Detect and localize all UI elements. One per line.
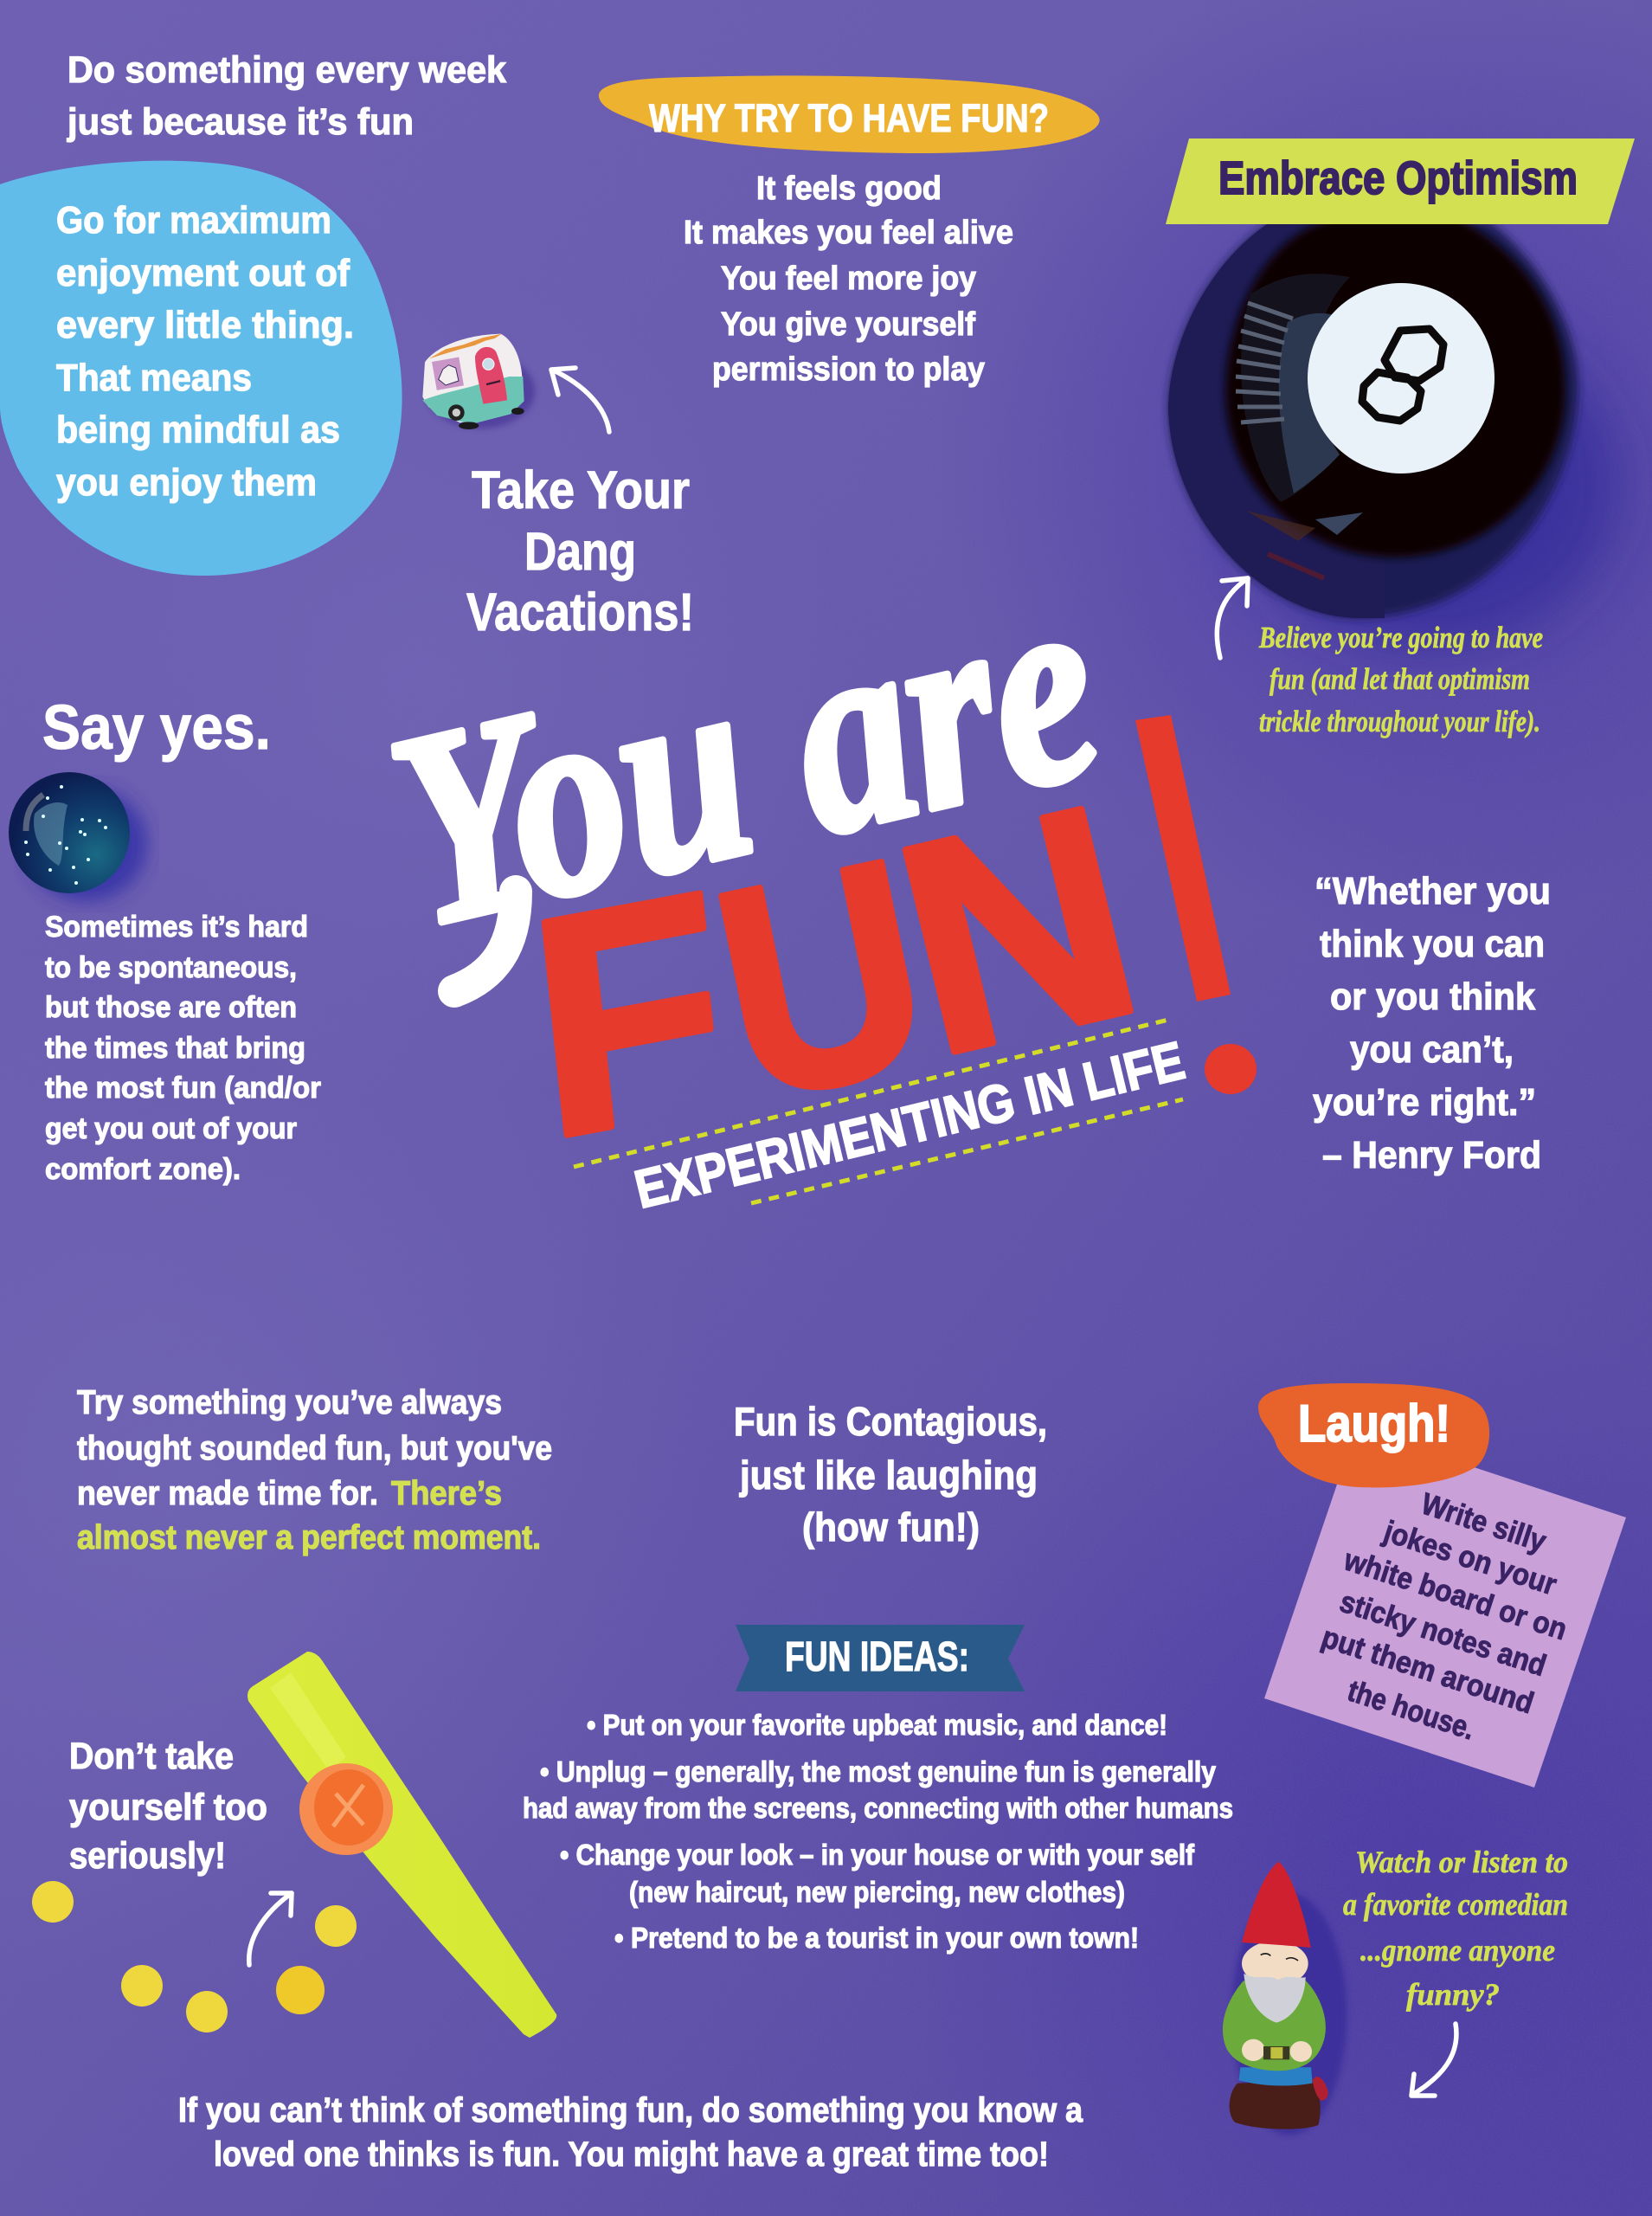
text: try something you've always thought sounded fun [77, 1384, 552, 1556]
text: don't take yourself too seriously: Don’t take [69, 1736, 234, 1777]
arrow: to eight ball [1217, 578, 1248, 658]
panel: blue blob with maximum enjoyment text: enjoyment out of [56, 252, 350, 294]
list: reasons to have fun: You give yourself [721, 306, 975, 343]
list: fun ideas [523, 1709, 1233, 1954]
list: fun ideas: had away from the screens, connecting with other humans [523, 1792, 1233, 1824]
script note: watch or listen to a favorite comedian: a favorite comedian [1343, 1887, 1568, 1922]
icon: toy caravan [422, 334, 535, 429]
script note: believe you're going to have fun: Believe you’re going to have [1258, 621, 1543, 654]
list: reasons to have fun [684, 171, 1013, 388]
title: FUN! red letters [517, 616, 1290, 1215]
title: FUN! red letters: N [871, 742, 1165, 1118]
quote: henry ford: you’re right.” [1313, 1081, 1536, 1124]
title: FUN! red letters: F [517, 825, 740, 1204]
text: don't take yourself too seriously [69, 1736, 267, 1877]
heading: take your dang vacations: Dang [524, 522, 636, 581]
script note: watch or listen to a favorite comedian: ...gnome anyone [1360, 1933, 1555, 1968]
quote: henry ford: – Henry Ford [1322, 1134, 1541, 1176]
text: sometimes it's hard to be spontaneous: Sometimes it’s hard [45, 911, 308, 944]
banner: embrace optimism: Embrace Optimism [1218, 152, 1578, 204]
text: fun is contagious: just like laughing [739, 1453, 1038, 1498]
banner: fun ideas: FUN IDEAS: [785, 1634, 969, 1680]
panel: blue blob with maximum enjoyment text: every little thing. [56, 304, 354, 346]
tagline: experimenting in life: EXPERIMENTING IN LIFE [629, 1031, 1190, 1221]
text: fun is contagious: (how fun!) [802, 1504, 980, 1549]
quote: henry ford: you can’t, [1350, 1028, 1514, 1071]
script note: watch or listen to a favorite comedian: funny? [1406, 1977, 1500, 2012]
panel: sticky note with silly jokes: white board or on [1340, 1543, 1571, 1646]
heading: take your dang vacations: Take Your [472, 461, 690, 519]
heading: take your dang vacations [466, 461, 694, 641]
script note: watch or listen to a favorite comedian: Watch or listen to [1355, 1845, 1568, 1879]
arrow: to gnome [1411, 2024, 1456, 2096]
list: reasons to have fun: It feels good [756, 171, 942, 207]
heading: laugh: Laugh! [1298, 1395, 1450, 1453]
title: you are: You are [367, 528, 1123, 985]
text: sometimes it's hard to be spontaneous: but those are often [45, 991, 297, 1024]
text: sometimes it's hard to be spontaneous: comfort zone). [45, 1153, 241, 1186]
script note: believe you're going to have fun: fun (and let that optimism [1270, 662, 1530, 696]
text: sometimes it's hard to be spontaneous: to be spontaneous, [45, 951, 297, 984]
text: do something every week [67, 49, 506, 143]
heading: say yes: Say yes. [42, 693, 271, 763]
quote: henry ford [1313, 870, 1551, 1176]
list: reasons to have fun: permission to play [712, 351, 985, 388]
text: fun is contagious: Fun is Contagious, [734, 1399, 1047, 1444]
list: fun ideas: • Put on your favorite upbeat music, and dance! [587, 1709, 1167, 1741]
panel: blue blob with maximum enjoyment text: Go for maximum [56, 199, 331, 242]
list: fun ideas: • Pretend to be a tourist in your own town! [614, 1922, 1139, 1954]
heading: laugh [1258, 1383, 1489, 1487]
quote: henry ford: think you can [1320, 923, 1545, 965]
banner: fun ideas [736, 1625, 1025, 1691]
text: sometimes it's hard to be spontaneous: the times that bring [45, 1032, 305, 1065]
text: do something every week: just because it’s fun [67, 101, 414, 143]
text: sometimes it's hard to be spontaneous [45, 911, 321, 1186]
icon: yellow kazoo [247, 1652, 556, 2038]
text: if you can't think of something fun: If you can’t think of something fun, do something you know a [178, 2091, 1083, 2129]
list: fun ideas: • Unplug – generally, the most genuine fun is generally [540, 1755, 1217, 1788]
panel: sticky note with silly jokes: Write silly [1417, 1487, 1551, 1559]
list: reasons to have fun: You feel more joy [721, 261, 976, 297]
script note: believe you're going to have fun: trickle throughout your life). [1259, 705, 1540, 738]
text: try something you've always thought sounded fun: thought sounded fun, but you've [77, 1430, 552, 1467]
arrow: to caravan [551, 368, 609, 432]
heading: why try to have fun: WHY TRY TO HAVE FUN? [649, 96, 1049, 140]
arrow: to kazoo [249, 1893, 292, 1965]
list: reasons to have fun: It makes you feel alive [684, 215, 1013, 251]
text: sometimes it's hard to be spontaneous: the most fun (and/or [45, 1072, 321, 1105]
list: fun ideas: (new haircut, new piercing, new clothes) [629, 1876, 1125, 1908]
quote: henry ford: “Whether you [1315, 870, 1551, 912]
panel: sticky note with silly jokes [1264, 1428, 1626, 1788]
title: FUN! red letters: U [692, 795, 951, 1163]
icon: glitter marble [9, 772, 147, 901]
icon: magic eight ball [1168, 216, 1618, 649]
panel: blue blob with maximum enjoyment text [0, 161, 402, 576]
panel: blue blob with maximum enjoyment text: you enjoy them [56, 461, 317, 504]
text: try something you've always thought sounded fun: Try something you’ve always [77, 1384, 502, 1421]
text: don't take yourself too seriously: yourself too [69, 1787, 267, 1828]
panel: sticky note with silly jokes: sticky notes and [1336, 1585, 1550, 1683]
banner: embrace optimism [1166, 138, 1635, 224]
text: try something you've always thought sounded fun: never made time for. [77, 1475, 378, 1512]
panel: sticky note with silly jokes: jokes on your [1379, 1514, 1561, 1602]
panel: sticky note with silly jokes: the house. [1344, 1674, 1479, 1747]
script note: believe you're going to have fun [1258, 621, 1543, 738]
quote: henry ford: or you think [1330, 976, 1535, 1018]
text: fun is contagious [734, 1399, 1047, 1549]
heading: take your dang vacations: Vacations! [466, 583, 694, 641]
text: try something you've always thought sounded fun: There’s [391, 1475, 502, 1512]
list: fun ideas: • Change your look – in your house or with your self [560, 1839, 1195, 1871]
icon: laughing gnome [1223, 1862, 1347, 2135]
text: sometimes it's hard to be spontaneous: get you out of your [45, 1112, 297, 1145]
heading: why try to have fun [599, 75, 1100, 153]
panel: sticky note with silly jokes: put them around [1318, 1620, 1538, 1720]
text: if you can't think of something fun [178, 2091, 1083, 2174]
panel: blue blob with maximum enjoyment text: That means [56, 357, 252, 399]
panel: blue blob with maximum enjoyment text: being mindful as [56, 409, 340, 451]
text: if you can't think of something fun: loved one thinks is fun. You might have a great time too! [214, 2135, 1049, 2174]
text: don't take yourself too seriously: seriously! [69, 1835, 226, 1877]
script note: watch or listen to a favorite comedian [1343, 1845, 1568, 2012]
title: FUN! red letters: ! [1102, 616, 1290, 1215]
text: try something you've always thought sounded fun: almost never a perfect moment. [77, 1519, 541, 1556]
text: do something every week: Do something every week [67, 49, 506, 91]
icon: yellow dots [32, 1881, 357, 2032]
